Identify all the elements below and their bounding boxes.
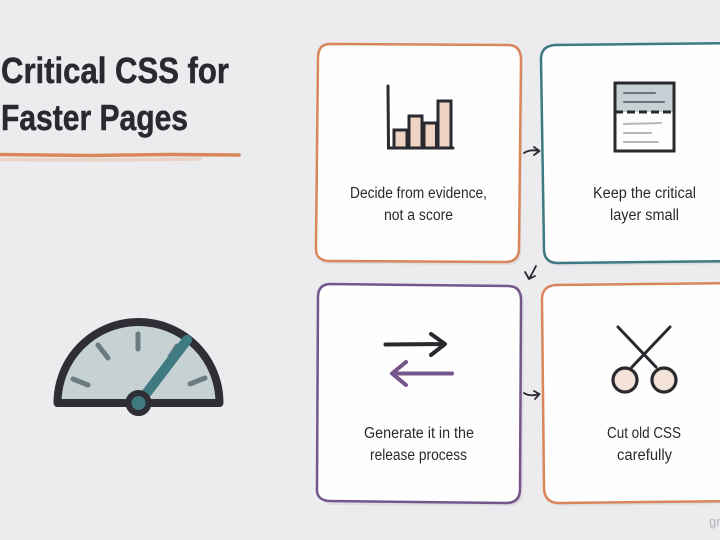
caption: Keep the critical — [593, 185, 696, 202]
caption — [364, 425, 474, 464]
icon: document with fold line — [615, 83, 674, 151]
icon: bar chart — [388, 86, 453, 148]
arrow: evidence to critical layer — [524, 147, 540, 155]
caption: carefully — [617, 447, 672, 464]
icon: speed gauge — [58, 322, 220, 413]
arrow: release process to cut old css — [524, 391, 540, 399]
arrow: critical layer to cut old css — [525, 266, 536, 279]
gauge needle — [139, 340, 187, 403]
gauge hub — [128, 393, 148, 413]
caption: layer small — [610, 207, 679, 224]
title underline — [0, 154, 239, 160]
caption: not a score — [384, 207, 453, 224]
caption: Generate it in the — [364, 425, 474, 442]
icon: scissors — [613, 327, 676, 392]
caption — [607, 425, 681, 464]
panel: critical layer — [541, 43, 720, 266]
caption: release process — [370, 447, 467, 464]
panel: evidence — [316, 44, 523, 265]
caption — [593, 185, 696, 224]
panel: cut old css — [542, 283, 720, 506]
title: Faster Pages — [1, 97, 188, 138]
gauge ticks — [73, 334, 205, 385]
caption — [350, 185, 487, 224]
panel: release process — [317, 284, 524, 506]
title: Critical CSS for — [1, 50, 229, 91]
icon: two-way arrows — [386, 334, 452, 385]
title — [1, 50, 229, 138]
caption: Decide from evidence, — [350, 185, 487, 202]
caption: Cut old CSS — [607, 425, 681, 442]
